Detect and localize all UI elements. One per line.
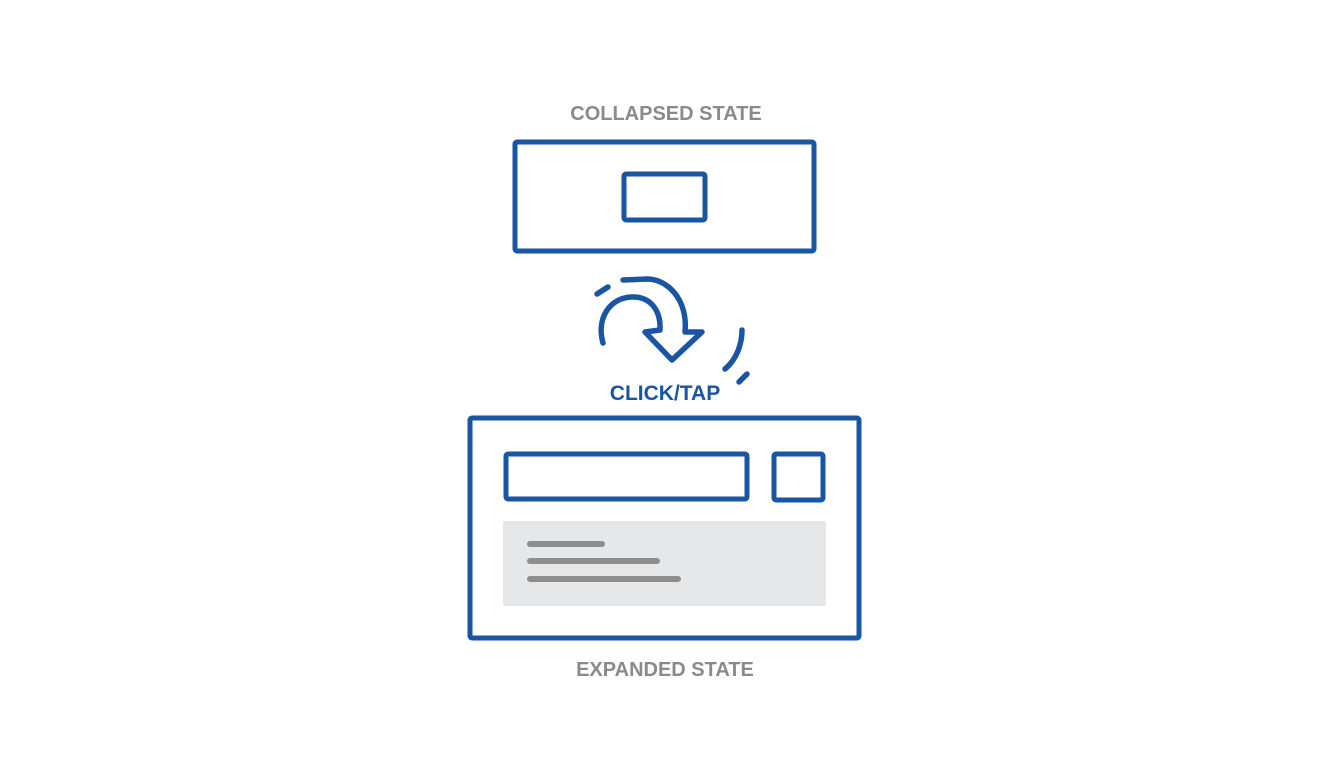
expanded box: [470, 418, 859, 638]
button square: [774, 454, 823, 500]
icon: click/tap arrow: [597, 279, 747, 382]
content panel: [503, 521, 826, 606]
label: click/tap: CLICK/TAP: [610, 382, 720, 405]
heading: collapsed state: COLLAPSED STATE: [570, 103, 762, 125]
input bar: [506, 454, 747, 499]
heading: expanded state: EXPANDED STATE: [576, 659, 754, 681]
collapsed box: [515, 142, 814, 251]
